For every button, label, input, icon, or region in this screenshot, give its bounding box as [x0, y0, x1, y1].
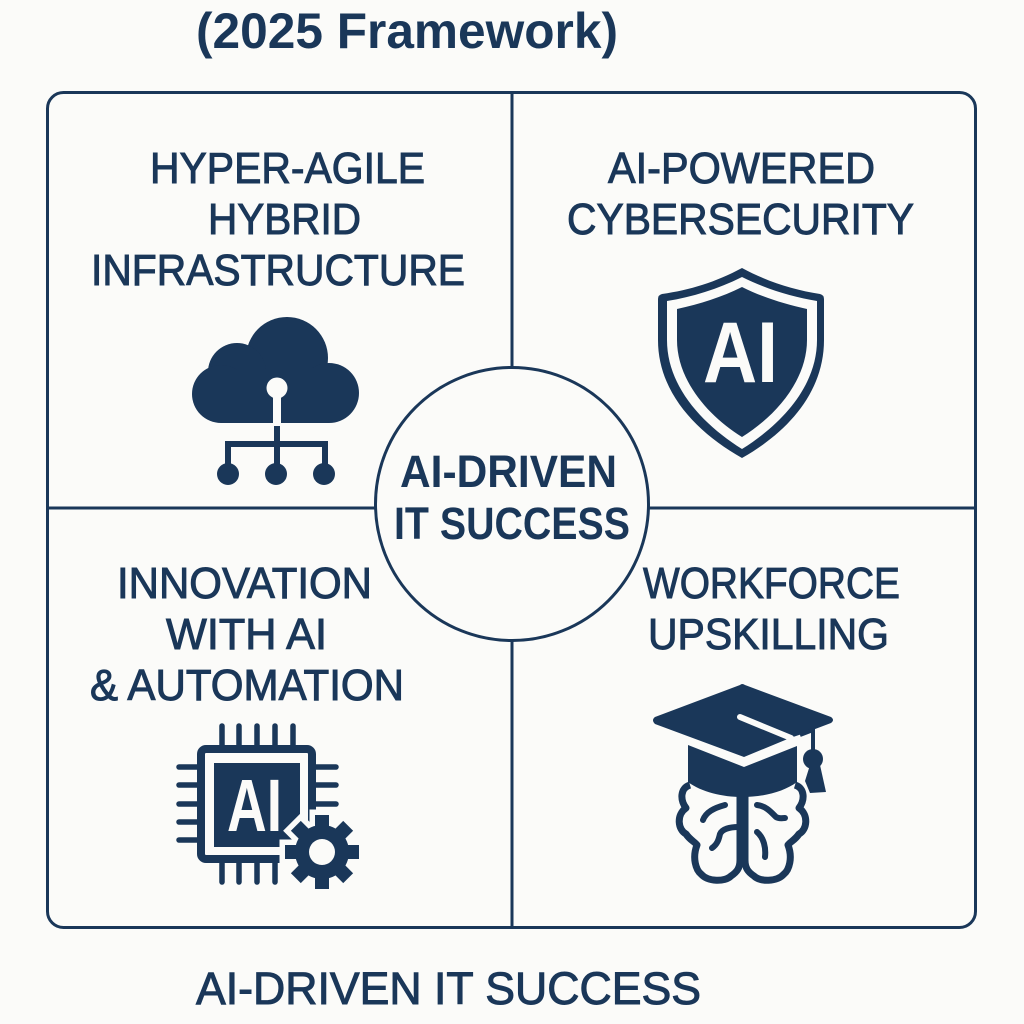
icon: AI chip with gear: AI — [227, 764, 282, 847]
panel: workforce upskilling — [643, 559, 900, 880]
center hub: AI-DRIVEN — [400, 446, 617, 497]
heading: ai-powered cybersecurity — [567, 144, 914, 244]
panel: ai-powered cybersecurity — [567, 144, 914, 458]
heading: ai-powered cybersecurity: CYBERSECURITY — [567, 195, 914, 244]
heading: workforce upskilling: WORKFORCE — [643, 559, 900, 608]
icon: AI chip with gear — [179, 726, 359, 889]
icon: gear — [285, 815, 359, 889]
panel: innovation with AI and automation — [90, 559, 404, 889]
heading: innovation with AI and automation: & AUTOMATION — [90, 661, 404, 710]
icon: graduation cap on brain — [653, 684, 833, 880]
heading: innovation with AI and automation — [90, 559, 404, 710]
heading: workforce upskilling: UPSKILLING — [648, 610, 889, 659]
icon: AI shield — [658, 268, 824, 458]
heading: workforce upskilling — [643, 559, 900, 659]
heading: hyper-agile hybrid infrastructure — [91, 144, 465, 295]
heading: hyper-agile hybrid infrastructure: HYPER-AGILE — [150, 144, 425, 193]
footer caption: AI-DRIVEN IT SUCCESS — [196, 963, 701, 1014]
panel: hyper-agile hybrid infrastructure — [91, 144, 465, 485]
icon: AI shield: AI — [703, 305, 778, 401]
heading: hyper-agile hybrid infrastructure: INFRASTRUCTURE — [91, 246, 465, 295]
icon: cloud network — [192, 317, 359, 485]
heading: innovation with AI and automation: WITH AI — [166, 610, 327, 659]
heading: ai-powered cybersecurity: AI-POWERED — [608, 144, 875, 193]
center hub — [376, 368, 648, 640]
heading: innovation with AI and automation: INNOVATION — [117, 559, 372, 608]
heading: hyper-agile hybrid infrastructure: HYBRID — [208, 195, 361, 244]
framework panel — [47, 92, 976, 928]
title: (2025 Framework) — [196, 3, 618, 59]
center hub: IT SUCCESS — [394, 498, 630, 549]
